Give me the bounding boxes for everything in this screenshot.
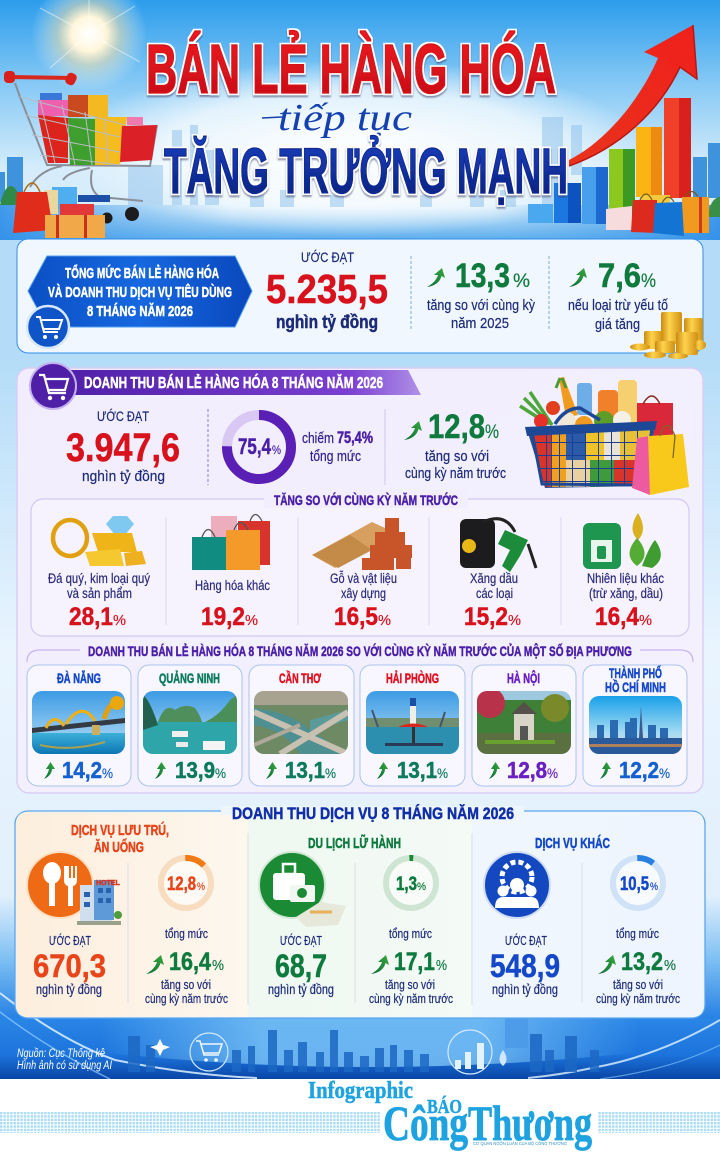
category: gems and metals: % xyxy=(113,612,126,629)
category: gems and metals xyxy=(48,516,150,631)
illustration: shopping cart with bags xyxy=(4,71,157,238)
illustration: grocery basket xyxy=(520,377,689,495)
service: other: nghìn tỷ đồng xyxy=(492,982,558,997)
card: Thành phố Hồ Chí Minh: THÀNH PHỐ xyxy=(609,664,662,681)
ring chart: 10.5%: 10,5 xyxy=(620,874,649,895)
icon: footer cart xyxy=(190,1033,228,1071)
card: Quảng Ninh: 13,9 xyxy=(175,757,215,783)
service: accommodation and food xyxy=(27,821,228,1006)
service: other: ƯỚC ĐẠT xyxy=(505,933,547,948)
category: gems and metals: Đá quý, kim loại quý xyxy=(48,571,150,586)
card: Đà Nẵng: ĐÀ NẴNG xyxy=(57,670,101,686)
share text: tổng mức xyxy=(310,449,361,465)
stat: 13,3%: % xyxy=(513,271,530,292)
subpanel heading: TĂNG SO VỚI CÙNG KỲ NĂM TRƯỚC xyxy=(274,491,458,508)
retail value: 3.947,6 xyxy=(66,426,180,470)
service: travel: cùng kỳ năm trước xyxy=(369,992,453,1006)
service: accommodation and food: ƯỚC ĐẠT xyxy=(49,933,91,948)
service: travel: tổng mức xyxy=(389,926,432,941)
service: travel: DU LỊCH LỮ HÀNH xyxy=(308,834,401,852)
category: gems and metals: 28,1 xyxy=(69,603,113,631)
ring chart: 1.3%: 1,3 xyxy=(396,874,417,895)
source note: Hình ảnh có sử dụng AI xyxy=(17,1060,113,1072)
service: other: 548,9 xyxy=(490,948,560,984)
service: travel: nghìn tỷ đồng xyxy=(268,982,334,997)
category: other goods: 19,2 xyxy=(201,603,245,631)
icon: gold coins xyxy=(630,312,706,359)
category: other fuels: 16,4 xyxy=(595,603,639,631)
service: travel: ƯỚC ĐẠT xyxy=(280,933,322,948)
stat: 13,3% xyxy=(427,257,535,332)
panel heading: DOANH THU DỊCH VỤ 8 THÁNG NĂM 2026 xyxy=(232,804,514,823)
category: wood and building materials xyxy=(312,518,412,631)
service: travel: 17,1 xyxy=(394,948,435,976)
service: travel: tăng so với xyxy=(385,978,435,992)
card: Hà Nội xyxy=(472,665,576,786)
retail value: nghìn tỷ đồng xyxy=(82,468,165,485)
bottom band xyxy=(0,993,720,1079)
retail value: ƯỚC ĐẠT xyxy=(97,408,149,424)
icon: footer chart xyxy=(448,1030,506,1074)
category: wood and building materials: Gỗ và vật liệu xyxy=(330,571,397,586)
ring chart: 1.3% xyxy=(385,857,437,909)
panel: services revenue xyxy=(15,804,705,1018)
category: petrol: các loại xyxy=(476,586,513,601)
card: Đà Nẵng xyxy=(27,665,131,786)
card: Hà Nội: % xyxy=(547,765,558,781)
photo: Can Tho bridges xyxy=(254,691,348,754)
card: Thành phố Hồ Chí Minh: HỒ CHÍ MINH xyxy=(605,678,666,695)
stat: 13,3%: tăng so với cùng kỳ xyxy=(427,297,535,314)
ring chart: 12.8%: 12,8 xyxy=(167,874,196,895)
stat: 12,8%: 12,8 xyxy=(428,408,485,446)
ring chart: 10.5%: % xyxy=(650,881,658,893)
photo: Da Nang bridge xyxy=(32,691,125,754)
photo: Turtle tower xyxy=(475,688,571,754)
card: Cần Thơ xyxy=(249,665,354,786)
card: Cần Thơ: CẦN THƠ xyxy=(279,670,321,686)
card: Thành phố Hồ Chí Minh xyxy=(583,664,687,786)
icon: people and gear xyxy=(484,852,550,918)
service: travel xyxy=(259,834,453,1006)
service: other: DỊCH VỤ KHÁC xyxy=(535,835,610,852)
ring chart: 12.8% xyxy=(161,858,211,908)
service: accommodation and food: ĂN UỐNG xyxy=(94,838,144,856)
photo: Ho Chi Minh skyline xyxy=(589,696,682,754)
source note xyxy=(17,1048,113,1072)
service: accommodation and food: % xyxy=(212,957,224,974)
service: other: 13,2 xyxy=(621,948,663,976)
service: other: tăng so với xyxy=(613,978,663,992)
masthead: CƠ QUAN NGÔN LUẬN CỦA BỘ CÔNG THƯƠNG xyxy=(473,1140,567,1146)
icon: luggage and map xyxy=(259,852,346,927)
service: accommodation and food: tổng mức xyxy=(165,926,208,941)
category: gems and metals: và sản phẩm xyxy=(67,586,132,601)
ring chart: 12.8%: % xyxy=(197,881,205,893)
service: accommodation and food: 670,3 xyxy=(33,948,106,984)
card: Thành phố Hồ Chí Minh: % xyxy=(659,765,670,781)
category: other fuels: Nhiên liệu khác xyxy=(587,571,664,586)
masthead: Công xyxy=(383,1095,468,1151)
total value xyxy=(266,249,388,332)
card: Đà Nẵng: 14,2 xyxy=(62,757,102,783)
subpanel: growth by category xyxy=(31,490,689,636)
stat: 12,8%: tăng so với xyxy=(425,449,489,465)
category: other fuels: % xyxy=(639,612,652,629)
label banner: VÀ DOANH THU DỊCH VỤ TIÊU DÙNG xyxy=(48,283,232,301)
category: wood and building materials: xây dựng xyxy=(341,586,386,601)
total value: nghìn tỷ đồng xyxy=(276,312,378,332)
icon: purple cart xyxy=(30,363,76,409)
masthead: Infographic xyxy=(308,1078,413,1104)
label banner: 8 THÁNG NĂM 2026 xyxy=(87,303,193,320)
category: petrol: Xăng dầu xyxy=(470,571,518,586)
panel: total retail xyxy=(17,239,706,359)
category: other goods: Hàng hóa khác xyxy=(195,578,270,593)
card: Quảng Ninh xyxy=(138,665,242,786)
donut chart: 75.4% xyxy=(227,415,291,479)
card: Quảng Ninh: QUẢNG NINH xyxy=(159,670,220,686)
service: other: cùng kỳ năm trước xyxy=(596,992,680,1006)
icon: food and hotel xyxy=(27,852,122,925)
category: petrol xyxy=(460,519,536,631)
stat: 7,6% xyxy=(568,257,669,333)
card: Hà Nội: HÀ NỘI xyxy=(507,669,540,686)
category: petrol: 15,2 xyxy=(464,603,508,631)
service: accommodation and food: nghìn tỷ đồng xyxy=(36,982,102,997)
illustration: growth bars and arrow xyxy=(528,25,709,236)
stat: 7,6%: nếu loại trừ yếu tố xyxy=(568,297,669,314)
title line 2: tiếp tục xyxy=(278,97,412,139)
category: other goods xyxy=(192,514,270,631)
label banner xyxy=(28,256,252,327)
source note: Nguồn: Cục Thống kê xyxy=(17,1048,105,1060)
header illustration xyxy=(0,0,720,240)
card: Hải Phòng xyxy=(360,665,465,786)
stat: 12,8% xyxy=(404,408,506,482)
masthead xyxy=(0,1078,720,1159)
retail value xyxy=(66,408,180,485)
card: Hải Phòng: HẢI PHÒNG xyxy=(386,669,439,686)
card: Hải Phòng: 13,1 xyxy=(397,757,437,783)
card: Hà Nội: 12,8 xyxy=(507,757,547,783)
card: Đà Nẵng: % xyxy=(102,765,113,781)
icon: food and hotel: HOTEL xyxy=(96,880,120,887)
stat: 7,6%: 7,6 xyxy=(598,257,641,295)
service: accommodation and food: DỊCH VỤ LƯU TRÚ, xyxy=(71,821,169,839)
donut chart: 75.4%: 75,4 xyxy=(238,434,272,459)
icon: cart xyxy=(27,306,69,348)
category: petrol: % xyxy=(508,612,521,629)
service: accommodation and food: tăng so với xyxy=(161,978,211,992)
service: travel: 68,7 xyxy=(275,948,327,984)
category: other fuels: (trừ xăng, dầu) xyxy=(589,586,663,601)
stat: 7,6%: giá tăng xyxy=(595,316,640,333)
total value: ƯỚC ĐẠT xyxy=(301,249,354,265)
card: Quảng Ninh: % xyxy=(215,765,226,781)
sun xyxy=(31,0,147,92)
share text: 75,4% xyxy=(337,428,373,447)
label banner: TỔNG MỨC BÁN LẺ HÀNG HÓA xyxy=(65,264,219,282)
section banner xyxy=(60,370,421,395)
ring chart: 10.5% xyxy=(613,858,663,908)
photo: Hai Phong tower xyxy=(366,691,459,754)
category: other fuels xyxy=(583,513,664,631)
section banner: DOANH THU BÁN LẺ HÀNG HÓA 8 THÁNG NĂM 2026 xyxy=(84,374,383,392)
stat: 13,3%: 13,3 xyxy=(455,257,510,295)
service: accommodation and food: cùng kỳ năm trước xyxy=(145,992,228,1006)
stat: 13,3%: năm 2025 xyxy=(451,315,509,332)
masthead: BÁO xyxy=(427,1095,462,1118)
service: travel: % xyxy=(436,957,447,974)
title xyxy=(146,30,568,207)
ring chart: 1.3%: % xyxy=(417,881,426,893)
service: other: tổng mức xyxy=(616,926,659,941)
service: accommodation and food: 16,4 xyxy=(169,948,211,976)
donut chart: 75.4%: % xyxy=(272,443,281,457)
category: wood and building materials: % xyxy=(378,612,391,629)
photo: Ha Long bay xyxy=(143,691,237,754)
stat: 12,8%: cùng kỳ năm trước xyxy=(405,466,506,482)
category: wood and building materials: 16,5 xyxy=(334,603,378,631)
stat: 7,6%: % xyxy=(641,271,656,292)
card: Hải Phòng: % xyxy=(437,765,448,781)
panel: retail revenue xyxy=(17,363,703,793)
skyline xyxy=(128,117,582,207)
card: Thành phố Hồ Chí Minh: 12,2 xyxy=(619,757,659,783)
service: other: % xyxy=(664,957,676,974)
total value: 5.235,5 xyxy=(266,266,388,312)
share text xyxy=(302,428,373,465)
masthead: Thương xyxy=(468,1095,592,1151)
stat: 12,8%: % xyxy=(485,422,499,443)
city skyline xyxy=(128,1018,599,1072)
category: other goods: % xyxy=(245,612,258,629)
card: Cần Thơ: % xyxy=(325,765,336,781)
card: Cần Thơ: 13,1 xyxy=(285,757,325,783)
service: other xyxy=(484,835,680,1006)
share text: chiếm xyxy=(302,431,334,447)
